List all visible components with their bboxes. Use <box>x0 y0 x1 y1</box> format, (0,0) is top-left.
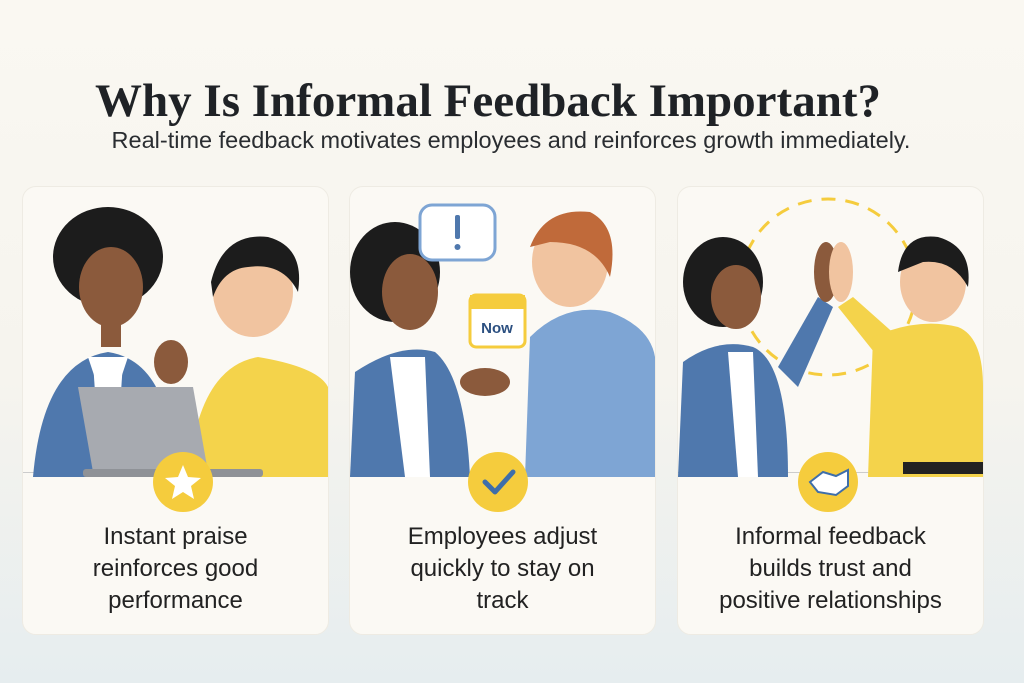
text: trust <box>719 523 942 614</box>
text: instant praise: performance <box>108 587 243 614</box>
text: adjust quickly <box>408 523 597 614</box>
text: instant praise: Instant praise <box>103 523 248 550</box>
text: adjust quickly: quickly to stay on <box>410 555 595 582</box>
text: instant praise <box>93 523 258 614</box>
title: Why Is Informal Feedback Important? <box>95 75 881 127</box>
text: trust: builds trust and <box>749 555 912 582</box>
illustration: woman with laptop and man <box>23 207 328 477</box>
icon: star <box>153 452 213 512</box>
text: adjust quickly: Employees adjust <box>408 523 597 550</box>
illustration: conversation with speech bubble and calendar <box>350 205 655 477</box>
icon: handshake <box>798 452 858 512</box>
panel: adjust quickly <box>349 186 656 635</box>
text: trust: positive relationships <box>719 587 942 614</box>
text: trust: Informal feedback <box>735 523 926 550</box>
icon: checkmark <box>468 452 528 512</box>
illustration: high five <box>678 199 983 477</box>
panel: instant praise <box>22 186 329 635</box>
panel: trust <box>677 186 984 635</box>
illustration: conversation with speech bubble and calendar: Now <box>481 320 513 337</box>
text: adjust quickly: track <box>476 587 528 614</box>
subtitle: Real-time feedback motivates employees and reinforces growth immediately. <box>112 127 910 153</box>
text: instant praise: reinforces good <box>93 555 258 582</box>
